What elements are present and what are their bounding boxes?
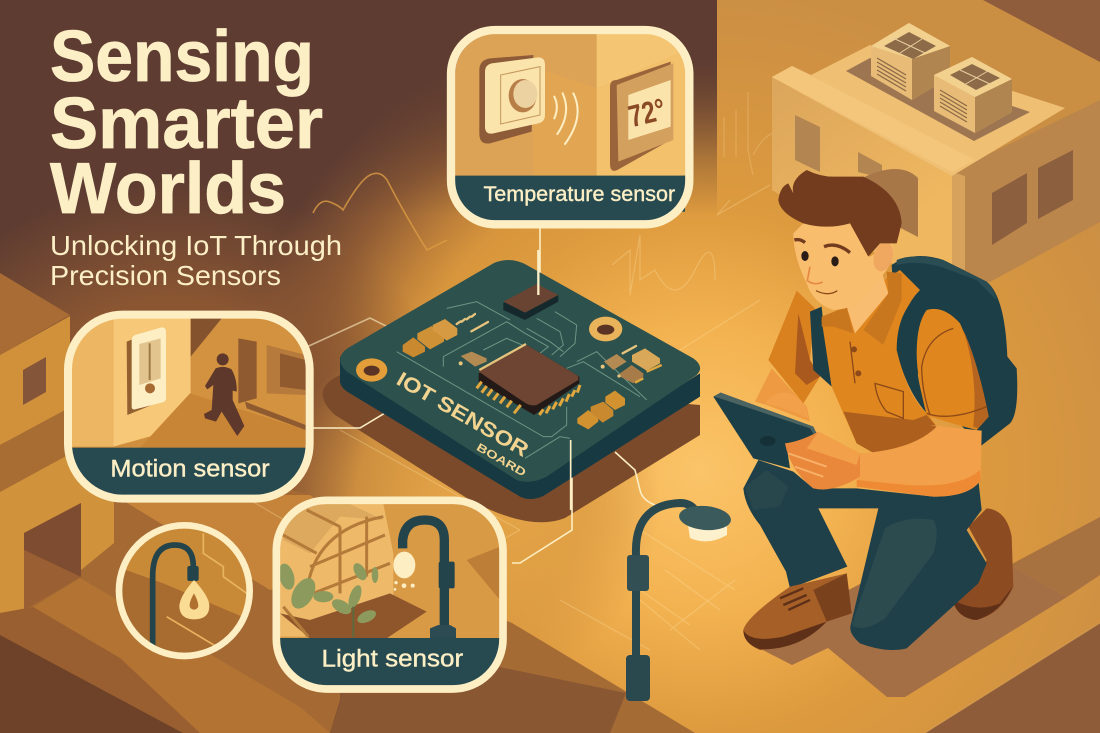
fingers on screen bbox=[765, 393, 808, 418]
connector wires bbox=[300, 228, 655, 563]
components right bbox=[601, 348, 662, 383]
IoT sensor board: BOARD bbox=[474, 442, 528, 479]
head bbox=[778, 170, 902, 310]
right sleeve bbox=[917, 309, 989, 430]
building left wall bbox=[772, 77, 952, 300]
wire from chip bbox=[535, 250, 542, 295]
capacitors lower right bbox=[577, 391, 625, 429]
rooftop unit one bbox=[871, 23, 950, 100]
street lamp bbox=[626, 503, 732, 701]
hair bbox=[778, 170, 902, 257]
collar bbox=[822, 272, 902, 345]
board label: IOT SENSOR bbox=[392, 368, 533, 462]
main microcontroller chip bbox=[477, 344, 580, 415]
title: Smarter bbox=[50, 84, 323, 164]
signal waves bbox=[554, 93, 578, 144]
arched doorway bbox=[862, 169, 918, 237]
plants bbox=[276, 561, 378, 637]
wall sensor icon bbox=[127, 327, 166, 415]
board top face bbox=[340, 260, 700, 482]
title: Worlds bbox=[50, 149, 286, 229]
light pole bbox=[393, 520, 456, 638]
callout: motion sensor bbox=[68, 315, 310, 499]
board shadow bbox=[323, 375, 700, 522]
faint circuit traces and waveforms bbox=[250, 92, 1100, 733]
subtitle: Unlocking IoT Through bbox=[50, 230, 342, 261]
rooftop unit two bbox=[934, 57, 1012, 133]
building right wall bbox=[952, 100, 1100, 282]
shirt left sleeve bbox=[768, 291, 820, 403]
circuit traces bbox=[397, 302, 647, 458]
callout: temperature sensor: Temperature sensor bbox=[483, 181, 675, 206]
capacitors left bbox=[403, 319, 457, 357]
small component bbox=[459, 352, 487, 367]
callout: temperature sensor bbox=[451, 30, 689, 227]
hand on tablet bbox=[785, 432, 860, 489]
sensor chip top bbox=[503, 284, 558, 320]
neck bbox=[847, 272, 888, 333]
wall display 72: 72° bbox=[625, 92, 669, 134]
subtitle bbox=[50, 230, 342, 291]
right building with rooftop units bbox=[772, 23, 1100, 300]
near boot bbox=[743, 573, 852, 650]
man shadow bbox=[749, 560, 1067, 697]
subtitle: Precision Sensors bbox=[50, 260, 281, 291]
greenhouse frame bbox=[280, 510, 390, 637]
title bbox=[50, 17, 323, 229]
thermostat icon bbox=[479, 55, 545, 144]
left strap bbox=[810, 307, 832, 387]
backpack bbox=[892, 256, 1017, 447]
shirt buttons and pocket bbox=[850, 342, 903, 418]
left arm bbox=[755, 368, 810, 422]
building roof bbox=[772, 45, 1065, 176]
roof shadow bbox=[846, 58, 1030, 141]
wall windows right bbox=[992, 150, 1073, 245]
mounting hole right bbox=[589, 317, 622, 341]
callout: light drop icon bbox=[117, 525, 250, 656]
callout: motion sensor: Motion sensor bbox=[110, 456, 270, 483]
face features bbox=[794, 240, 850, 294]
title: Sensing bbox=[50, 17, 314, 97]
right arm bbox=[857, 425, 982, 497]
tablet bbox=[713, 393, 824, 468]
man kneeling with tablet bbox=[713, 170, 1017, 650]
resistor dashes bbox=[457, 314, 636, 353]
wall windows left bbox=[795, 115, 882, 178]
wall display 72 bbox=[610, 62, 673, 171]
shirt torso bbox=[822, 270, 937, 457]
mounting hole left bbox=[356, 358, 387, 382]
waveform on title side bbox=[313, 173, 447, 250]
far boot bbox=[953, 508, 1013, 620]
callout: light sensor: Light sensor bbox=[321, 646, 463, 673]
board edge bbox=[340, 357, 700, 499]
IoT sensor board bbox=[340, 250, 700, 510]
legs bbox=[743, 460, 987, 650]
walking person silhouette bbox=[204, 353, 244, 436]
right strap bbox=[897, 289, 955, 417]
callout: light sensor bbox=[276, 500, 503, 689]
